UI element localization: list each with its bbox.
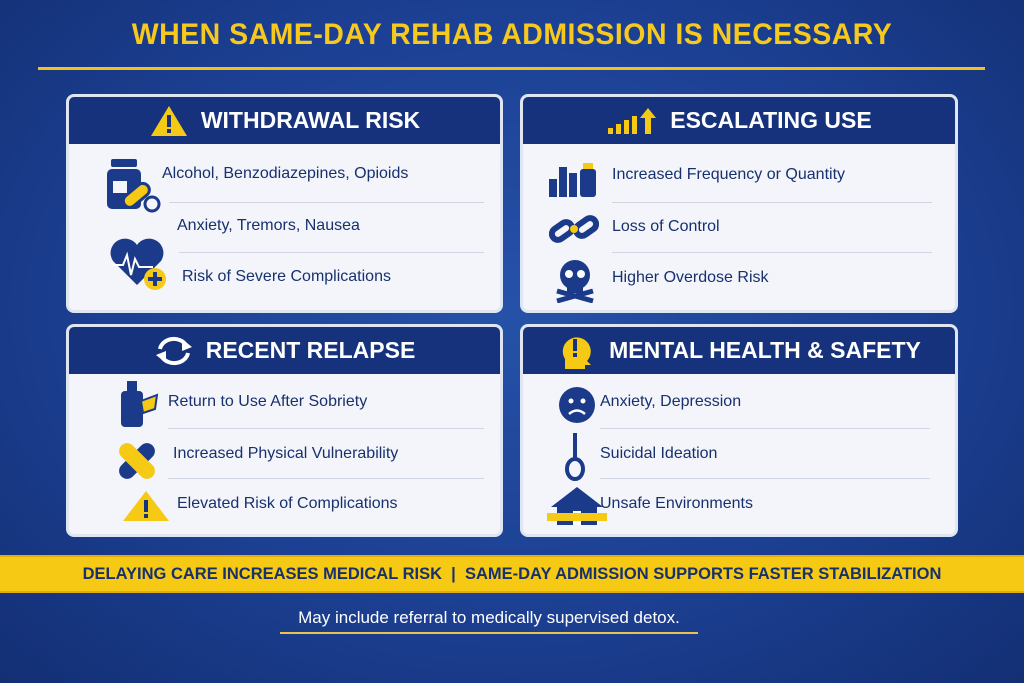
panel: mental health: Unsafe Environments bbox=[600, 495, 753, 512]
footnote bbox=[280, 608, 698, 634]
text: items: Return to Use After Sobriety bbox=[168, 393, 367, 410]
icon: house bbox=[547, 487, 607, 525]
header: escalating use: ESCALATING USE bbox=[670, 107, 872, 133]
icon: bars and bottle bbox=[549, 163, 596, 197]
header: recent relapse bbox=[69, 327, 500, 374]
footnote: May include referral to medically supervised detox. bbox=[298, 608, 680, 627]
panel: mental health bbox=[520, 324, 958, 537]
header: mental health bbox=[523, 327, 955, 374]
panel: withdrawal risk: Risk of Severe Complications bbox=[182, 268, 391, 285]
icon: broken chain bbox=[549, 215, 599, 243]
icon: pill bottle bbox=[107, 159, 160, 212]
header: mental health: MENTAL HEALTH & SAFETY bbox=[609, 337, 921, 363]
panel: withdrawal risk: Anxiety, Tremors, Nausea bbox=[177, 217, 360, 234]
icon: warning bbox=[123, 491, 169, 521]
icon: heart bbox=[110, 238, 166, 290]
panel: escalating use: Loss of Control bbox=[612, 218, 720, 235]
panel: recent relapse bbox=[66, 324, 503, 537]
text: items: Alcohol, Benzodiazepines, Opioids bbox=[162, 165, 408, 182]
panel: escalating use: Higher Overdose Risk bbox=[612, 269, 768, 286]
header: recent relapse: RECENT RELAPSE bbox=[206, 337, 415, 363]
icon: noose bbox=[565, 433, 585, 481]
icon: sad face bbox=[559, 387, 595, 423]
icon: bandage bbox=[119, 443, 155, 479]
banner bbox=[0, 555, 1024, 593]
panel: recent relapse: Increased Physical Vulnerability bbox=[173, 445, 398, 462]
text: items: Increased Frequency or Quantity bbox=[612, 166, 845, 183]
panel: withdrawal risk bbox=[66, 94, 503, 313]
panel: recent relapse: Elevated Risk of Complications bbox=[177, 495, 398, 512]
header: withdrawal risk bbox=[69, 97, 500, 144]
icon: bottle bbox=[121, 381, 158, 427]
banner: DELAYING CARE INCREASES MEDICAL RISK | SAME-DAY ADMISSION SUPPORTS FASTER STABILIZATION bbox=[83, 565, 941, 583]
header: escalating use bbox=[523, 97, 955, 144]
panel: escalating use bbox=[520, 94, 958, 313]
title: WHEN SAME-DAY REHAB ADMISSION IS NECESSARY bbox=[132, 18, 892, 51]
text: items: Anxiety, Depression bbox=[600, 393, 741, 410]
panel: mental health: Suicidal Ideation bbox=[600, 445, 717, 462]
header: withdrawal risk: WITHDRAWAL RISK bbox=[201, 107, 420, 133]
icon: skull bbox=[556, 260, 594, 303]
